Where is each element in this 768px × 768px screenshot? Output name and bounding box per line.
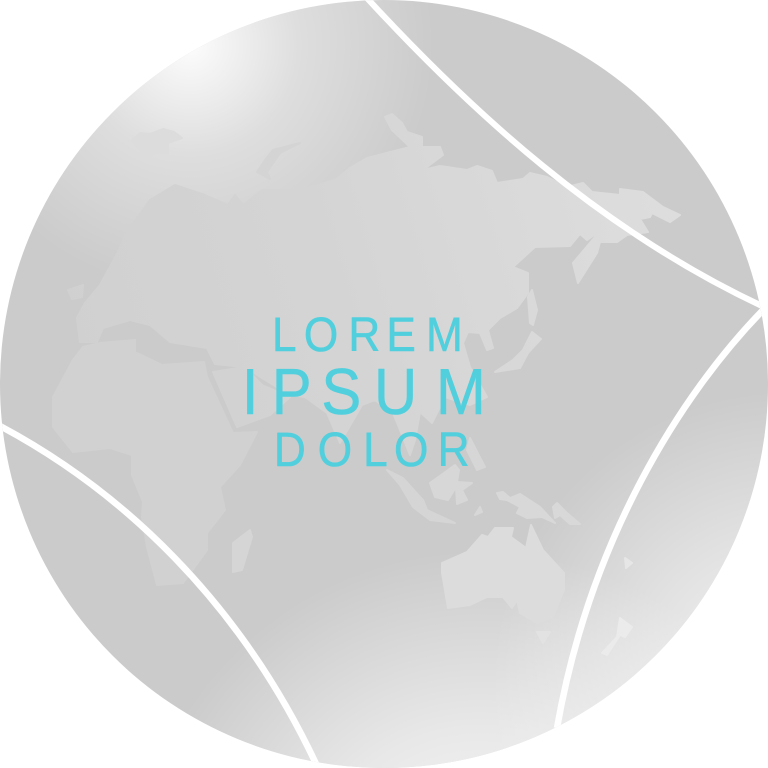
Iceland — [172, 132, 173, 133]
Tasmania — [537, 632, 550, 643]
title: lorem ipsum dolor — [242, 307, 486, 476]
Arabia — [290, 397, 291, 398]
title line 2: IPSUM — [242, 356, 486, 429]
world map — [172, 116, 681, 642]
New Guinea — [497, 492, 555, 523]
title line 1: LOREM — [272, 307, 463, 361]
title line 3: DOLOR — [274, 422, 470, 476]
Australia — [441, 524, 564, 606]
Philippines — [467, 438, 485, 470]
Sumatra and Java — [387, 470, 455, 523]
Africa — [53, 340, 257, 585]
Novaya Zemlya — [257, 143, 300, 179]
Borneo and Sulawesi — [430, 465, 472, 504]
curved line: top right — [366, 0, 762, 306]
Japan north — [528, 290, 537, 325]
New Zealand — [612, 617, 632, 642]
curved line: right — [557, 309, 764, 728]
New Britain — [553, 503, 580, 524]
curved line: bottom left — [0, 426, 318, 768]
Pacific island — [625, 558, 632, 568]
Madagascar — [233, 530, 252, 572]
Japan south — [495, 332, 541, 372]
Timor — [475, 507, 482, 515]
Eurasia — [252, 116, 681, 456]
Great Britain — [68, 285, 83, 299]
